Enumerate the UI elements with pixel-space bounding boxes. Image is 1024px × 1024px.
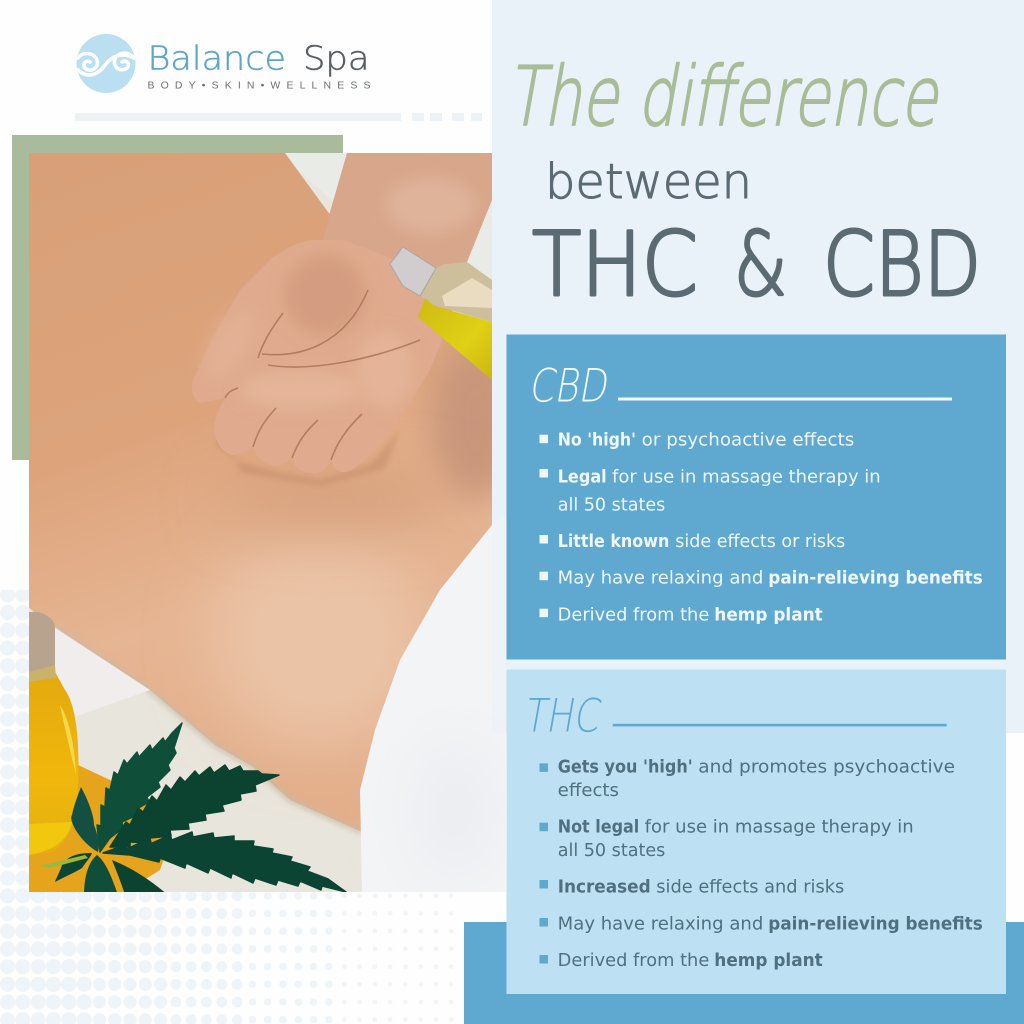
shadow of the sheet edge bbox=[55, 627, 362, 832]
THC list: effects bbox=[558, 781, 619, 801]
small rolled towel bbox=[55, 628, 150, 716]
THC list: May have relaxing and bbox=[558, 914, 763, 934]
header rule bbox=[75, 113, 482, 121]
CBD list: Little known bbox=[558, 532, 669, 552]
CBD list: all 50 states bbox=[558, 495, 665, 515]
massage photo bbox=[29, 153, 520, 895]
orange tray bbox=[29, 765, 172, 892]
hand shadow on back bbox=[218, 440, 394, 485]
THC heading: THC bbox=[521, 689, 606, 743]
THC list: Not legal bbox=[558, 818, 639, 838]
THC list: all 50 states bbox=[558, 841, 665, 861]
THC list: Derived from the bbox=[558, 951, 709, 971]
title bbox=[504, 50, 981, 316]
bottom blue block bbox=[464, 922, 1024, 1024]
CBD heading: CBD bbox=[526, 359, 614, 412]
panel: THC bbox=[506, 670, 1006, 994]
logo: Spa bbox=[303, 38, 370, 78]
title THC & CBD: CBD bbox=[823, 213, 981, 316]
torso shading bbox=[424, 348, 492, 505]
leaflet right bbox=[103, 832, 346, 892]
gap behind arm bbox=[286, 153, 492, 280]
tagline: BODY•SKIN•WELLNESS bbox=[148, 80, 370, 92]
photo base bbox=[29, 153, 492, 892]
CBD list: May have relaxing and bbox=[558, 569, 763, 589]
THC list: side effects and risks bbox=[656, 878, 844, 898]
CBD list: Derived from the bbox=[558, 605, 709, 625]
halftone dot pattern bbox=[0, 590, 464, 1024]
CBD list: No 'high' bbox=[558, 431, 636, 451]
CBD list: pain-relieving benefits bbox=[768, 569, 983, 589]
palm creases bbox=[225, 290, 420, 460]
logo icon: swirl circle bbox=[76, 34, 136, 93]
leaflet right-up bbox=[110, 765, 279, 847]
CBD list: for use in massage therapy in bbox=[612, 468, 881, 488]
THC list: pain-relieving benefits bbox=[768, 914, 983, 934]
panel: CBD bbox=[506, 334, 1006, 660]
green accent block bbox=[12, 135, 343, 460]
translucent strip over towel bbox=[492, 500, 506, 733]
THC list bbox=[540, 758, 983, 971]
title between: between bbox=[545, 154, 752, 210]
CBD list: Legal bbox=[558, 468, 607, 488]
leaflet down left bbox=[84, 855, 117, 892]
clear oil bottle bbox=[390, 247, 492, 380]
THC list: and promotes psychoactive bbox=[698, 758, 955, 778]
logo bbox=[76, 34, 370, 93]
CBD list: side effects or risks bbox=[675, 532, 845, 552]
CBD list: or psychoactive effects bbox=[642, 431, 854, 451]
THC list: Gets you 'high' bbox=[558, 758, 693, 778]
amber oil bottle bbox=[29, 612, 78, 856]
cannabis leaf bbox=[55, 723, 346, 895]
palm shading bbox=[288, 258, 362, 332]
THC list: hemp plant bbox=[714, 951, 823, 971]
right pale panel bbox=[492, 0, 1024, 733]
THC list: for use in massage therapy in bbox=[645, 818, 914, 838]
brand name: Balance bbox=[148, 38, 286, 78]
title THC & CBD bbox=[532, 213, 981, 316]
CBD list bbox=[540, 431, 983, 625]
leaflet left bbox=[55, 853, 92, 882]
CBD list: hemp plant bbox=[714, 605, 823, 625]
leaflet down right bbox=[112, 860, 164, 892]
leaflet up bbox=[97, 723, 182, 852]
THC list: Increased bbox=[558, 878, 651, 898]
title THC & CBD: & bbox=[734, 213, 787, 316]
back and torso bbox=[29, 153, 492, 832]
hand bbox=[192, 240, 442, 473]
large white towel bbox=[360, 515, 506, 892]
arm bbox=[323, 153, 492, 350]
title THC & CBD: THC bbox=[532, 213, 698, 316]
leaflet small bbox=[71, 787, 99, 852]
